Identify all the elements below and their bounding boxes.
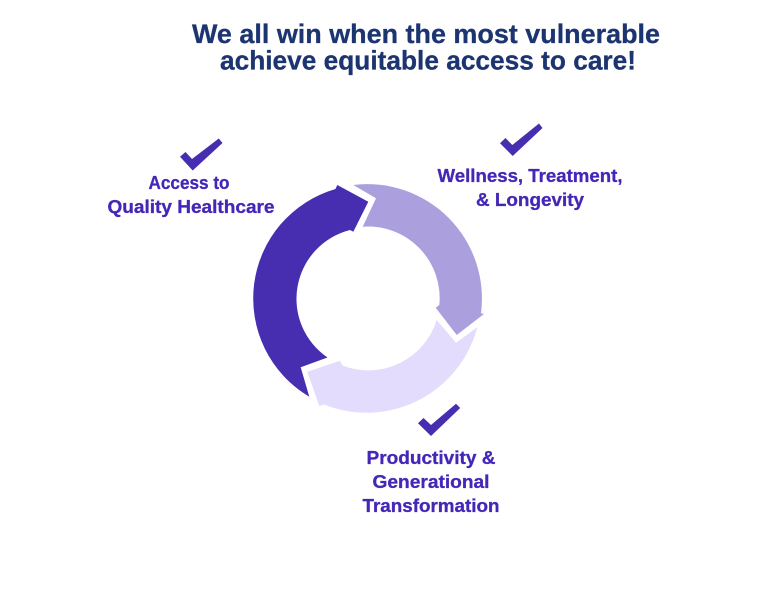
label: productivity and generational transformation: Generational bbox=[372, 472, 490, 492]
arrow segment: wellness and treatment bbox=[353, 184, 484, 335]
arrow segment: access to healthcare bbox=[253, 185, 368, 397]
arrow segment: productivity and transformation bbox=[307, 320, 477, 413]
title: achieve equitable access to care! bbox=[220, 46, 636, 76]
label: wellness, treatment and longevity: Wellness, Treatment, bbox=[438, 166, 622, 186]
label: access to quality healthcare: Access to bbox=[148, 173, 230, 193]
cycle diagram bbox=[253, 184, 484, 413]
icon: check mark, productivity bbox=[418, 404, 460, 436]
title: We all win when the most vulnerable bbox=[192, 19, 660, 49]
label: wellness, treatment and longevity bbox=[438, 166, 622, 210]
label: access to quality healthcare: Quality Healthcare bbox=[108, 197, 274, 217]
icon: check mark, access bbox=[180, 138, 222, 170]
icon: check mark, wellness bbox=[500, 124, 542, 156]
label: wellness, treatment and longevity: & Longevity bbox=[476, 190, 584, 210]
title bbox=[192, 19, 660, 76]
label: productivity and generational transformation: Productivity & bbox=[366, 448, 496, 468]
label: productivity and generational transformation bbox=[362, 448, 500, 516]
label: access to quality healthcare bbox=[108, 173, 274, 217]
label: productivity and generational transformation: Transformation bbox=[362, 496, 500, 516]
